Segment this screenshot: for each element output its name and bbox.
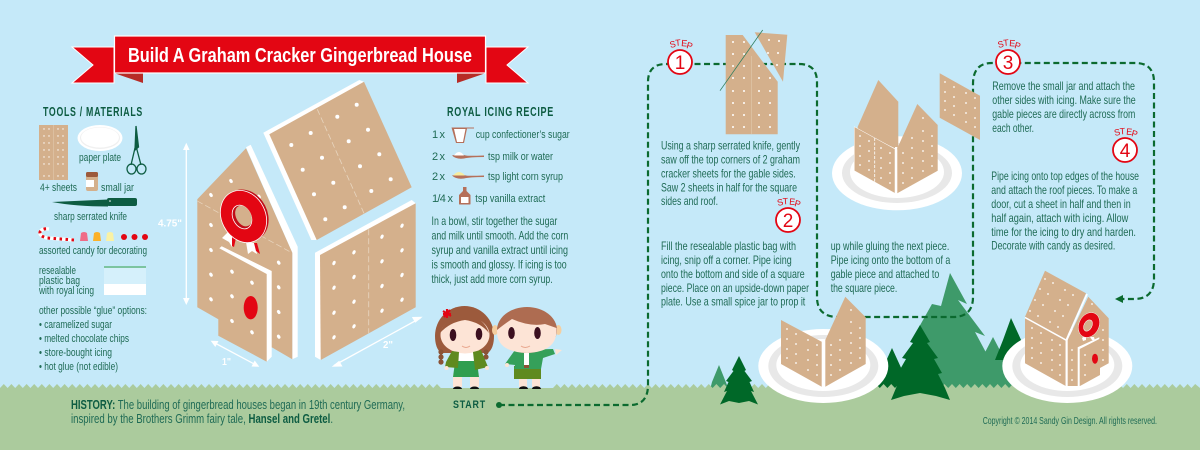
text: glue options <box>39 305 147 373</box>
step 2 text: onto the bottom and side of a square <box>661 267 805 281</box>
girl <box>435 306 494 389</box>
icon: plastic bag <box>104 266 146 295</box>
step 4 text: and attach the roof pieces. To make a <box>991 183 1138 197</box>
label: paper plate: paper plate <box>79 152 121 164</box>
step 4 text: half again, attach with icing. Allow <box>991 211 1129 225</box>
roof piece <box>263 80 412 240</box>
step 2 text continued: Pipe icing onto the bottom of a <box>831 253 951 267</box>
title banner: Build A Graham Cracker Gingerbread House <box>128 45 472 67</box>
step 3 marker <box>996 38 1022 74</box>
flying wall panel <box>940 73 980 140</box>
step 2 text: plate. Use a small spice jar to prop it <box>661 294 806 308</box>
text: glue options: • hot glue (not edible) <box>39 361 118 373</box>
dimension: 1 inch <box>211 341 259 368</box>
icon: candy cane <box>40 229 74 240</box>
text: recipe method: In a bowl, stir together the sugar <box>432 214 557 228</box>
ingredient: sugar <box>432 128 570 143</box>
step 2 text: piece. Place on an upside-down paper <box>661 281 809 295</box>
step 4 text: Pipe icing onto top edges of the house <box>991 169 1139 183</box>
step 3 marker: STEP <box>997 38 1022 51</box>
step 4 text: door, cut a sheet in half and then in <box>991 197 1131 211</box>
text: recipe method: is smooth and glossy. If icing is too <box>432 258 567 272</box>
step 2 text continued: the square piece. <box>831 281 897 295</box>
label: candy: assorted candy for decorating <box>39 245 147 257</box>
ingredient: milk <box>432 151 553 163</box>
label: plastic bag: plastic bag <box>39 275 80 287</box>
step 4 marker: STEP <box>1113 126 1139 139</box>
illustration: exploded gingerbread house <box>158 80 423 368</box>
icon: graham cracker sheet <box>39 125 68 180</box>
ingredient: corn syrup <box>432 171 563 183</box>
step 3 text: other sides with icing. Make sure the <box>992 93 1136 107</box>
step 2 marker: STEP <box>776 196 802 209</box>
finished house knob <box>1092 354 1098 364</box>
step 2 text: Fill the resealable plastic bag with <box>661 239 796 253</box>
label: plastic bag: with royal icing <box>38 285 94 297</box>
step 1 text: Using a sharp serrated knife, gently <box>661 138 800 152</box>
text: recipe method: thick, just add more corn syrup. <box>432 272 553 286</box>
panel: tools and materials <box>38 105 148 373</box>
gable piece with door <box>197 145 298 362</box>
ingredient: corn syrup: 2 x <box>432 171 446 183</box>
dimension: height <box>158 143 190 305</box>
dimension: height: 4.75" <box>158 218 182 230</box>
text: glue options: • caramelized sugar <box>39 319 112 331</box>
icon: assorted candy <box>80 232 148 241</box>
text: history: HISTORY: The building of gingerbread houses began in 19th century Germany, <box>71 397 511 412</box>
step 3 text: each other. <box>992 121 1034 135</box>
icon: small jar <box>86 172 98 191</box>
step 3 text: Remove the small jar and attach the <box>992 79 1135 93</box>
label: plastic bag: resealable <box>39 265 76 277</box>
step 1 text: Saw 2 sheets in half for the square <box>661 180 797 194</box>
step 4 marker <box>1113 126 1139 162</box>
foreground trees <box>720 325 950 404</box>
end arrow <box>1115 295 1123 303</box>
ingredient: vanilla: tsp vanilla extract <box>475 193 545 205</box>
step 1 illustration: cracker and knife <box>720 30 787 134</box>
text: recipe method: and milk until smooth. Add the corn <box>432 228 568 242</box>
start dot <box>496 402 502 408</box>
step 1 marker: 1 <box>675 53 685 74</box>
title banner <box>72 36 528 83</box>
start label: START <box>453 399 486 411</box>
step 1 text: saw off the top corners of 2 graham <box>661 152 800 166</box>
step 2 marker: 2 <box>783 211 793 232</box>
ingredient: sugar: 1 x <box>432 129 446 141</box>
ingredient: milk: 2 x <box>432 151 446 163</box>
dimension: 1 inch: 1" <box>222 357 231 368</box>
step 2 text continued: up while gluing the next piece. <box>831 239 949 253</box>
icon: scissors <box>127 126 146 174</box>
illustration: finished house on plate <box>1002 271 1132 403</box>
ingredient: corn syrup: tsp light corn syrup <box>488 171 563 183</box>
text: history: inspired by the Brothers Grimm fairy tale, Hansel and Gretel. <box>71 411 359 426</box>
dashed route <box>499 63 1154 405</box>
boy <box>492 307 562 389</box>
step 3 text: gable pieces are directly across from <box>992 107 1135 121</box>
ingredient: vanilla: 1/4 x <box>432 193 454 205</box>
ingredient: sugar: cup confectioner’s sugar <box>476 129 570 141</box>
illustration: house on plate, step 3 <box>832 80 962 210</box>
heading: recipe: ROYAL ICING RECIPE <box>447 105 554 119</box>
trees behind the ground <box>710 273 1030 390</box>
text: recipe method: syrup and vanilla extract until icing <box>432 243 568 257</box>
step 1 text: sides and roof. <box>661 194 718 208</box>
illustration: house on plate, step 2 <box>758 297 888 403</box>
step 1 text: cracker sheets for the gable sides. <box>661 166 796 180</box>
wreath <box>212 181 277 254</box>
finished house wreath <box>1074 309 1104 341</box>
heading: tools: TOOLS / MATERIALS <box>43 105 143 119</box>
right wall piece <box>315 200 416 360</box>
step 4 marker: 4 <box>1120 141 1131 162</box>
ingredient: milk: tsp milk or water <box>488 151 553 163</box>
step 2 text: icing, snip off a corner. Pipe icing <box>661 253 792 267</box>
dimension: 2 inch <box>332 317 423 367</box>
label: knife: sharp serrated knife <box>54 211 127 223</box>
panel: royal icing recipe <box>432 105 572 286</box>
text: glue options: other possible “glue” options: <box>39 305 147 317</box>
step 1 marker: STEP <box>669 38 694 51</box>
step 2 text continued: gable piece and attached to <box>831 267 940 281</box>
step 4 text: Decorate with candy as desired. <box>991 238 1115 252</box>
text: glue options: • melted chocolate chips <box>39 333 129 345</box>
step 3 marker: 3 <box>1003 53 1013 74</box>
icon: knife <box>52 198 137 206</box>
label: small jar: small jar <box>101 182 134 194</box>
door knob <box>244 296 258 319</box>
step 2 marker <box>776 196 802 232</box>
ingredient: vanilla <box>432 187 545 205</box>
ground <box>0 384 1200 450</box>
step 1 marker <box>668 38 694 74</box>
icon: paper plate <box>78 125 122 151</box>
characters: Hansel and Gretel <box>435 306 562 389</box>
dimension: 2 inch: 2" <box>383 340 393 351</box>
step 4 text: time for the icing to dry and harden. <box>991 225 1136 239</box>
label: sheets: 4+ sheets <box>40 182 77 194</box>
text: glue options: • store-bought icing <box>39 347 112 359</box>
